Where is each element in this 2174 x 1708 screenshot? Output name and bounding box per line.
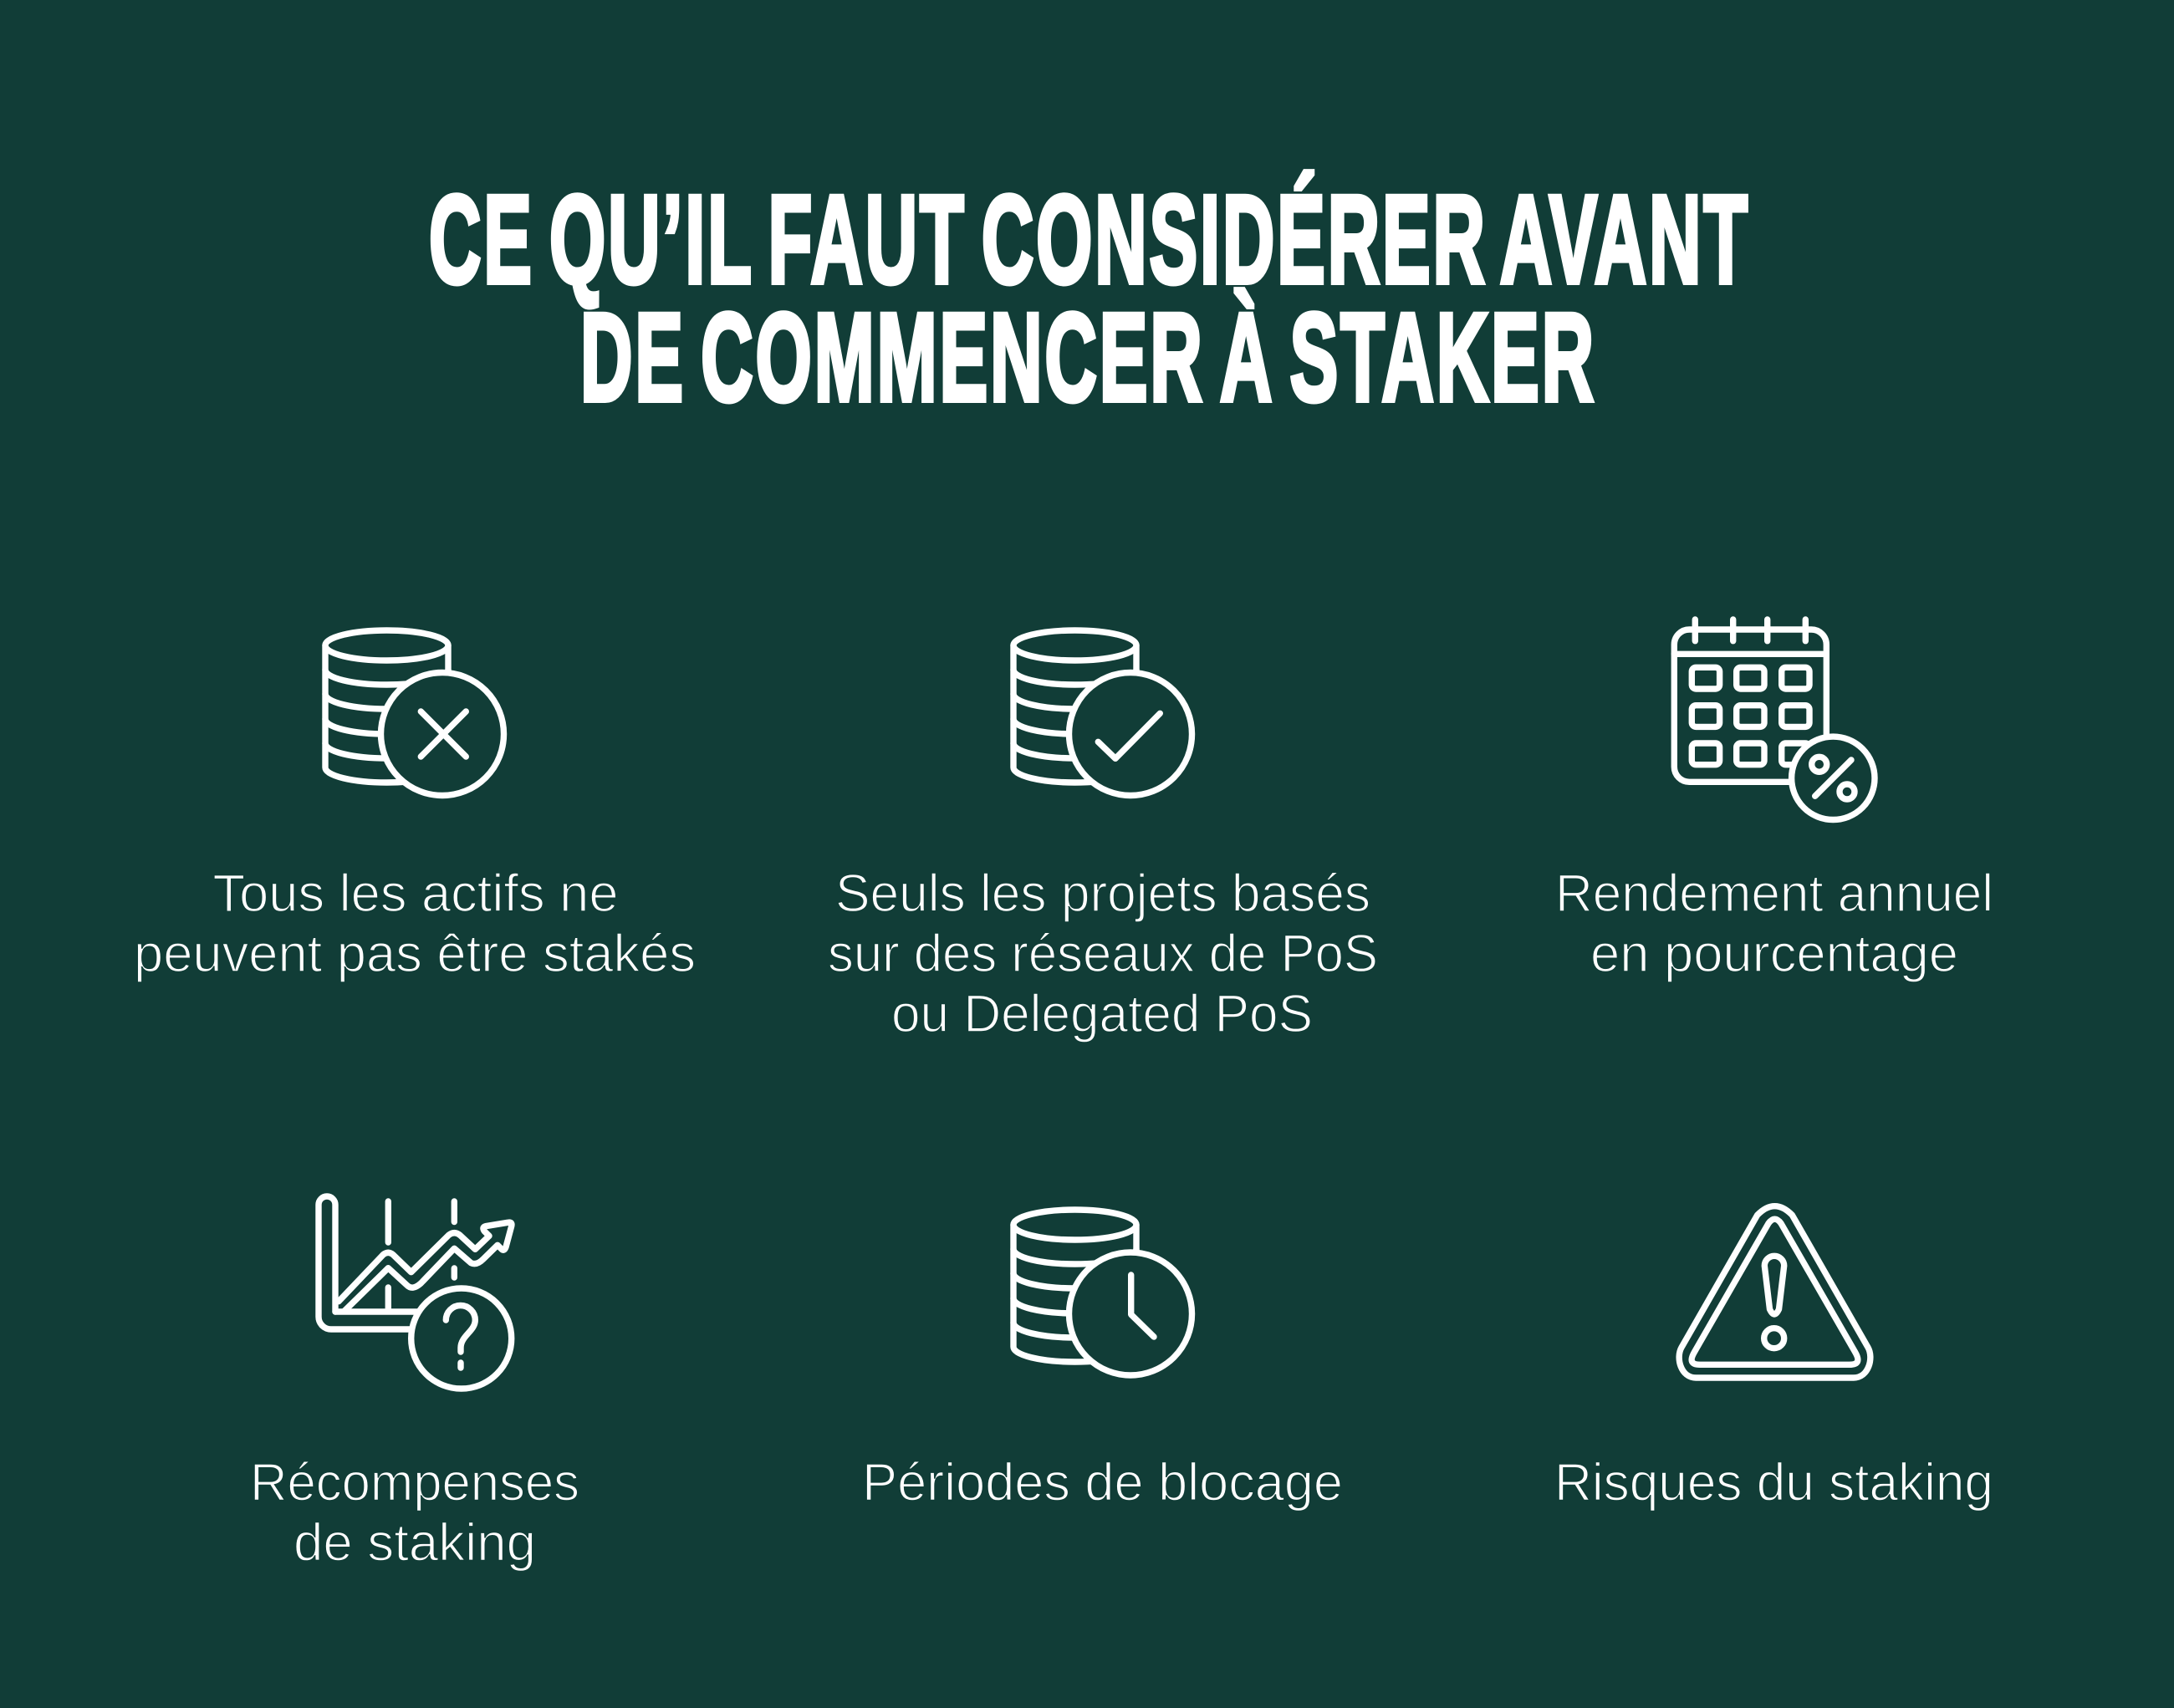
text: assets not all stakable: peuvent pas être stakés bbox=[134, 925, 696, 983]
text: assets not all stakable bbox=[134, 864, 696, 983]
icon: coin stack with clock bbox=[1013, 1210, 1192, 1375]
icon: rising chart with question mark bbox=[319, 1196, 512, 1389]
text: annual percentage yield: en pourcentage bbox=[1590, 925, 1958, 983]
text: assets not all stakable: Tous les actifs ne bbox=[212, 864, 619, 923]
text: annual percentage yield bbox=[1555, 864, 1993, 983]
text: annual percentage yield: Rendement annuel bbox=[1555, 864, 1993, 923]
text: staking rewards bbox=[250, 1453, 579, 1572]
text: staking risks: Risques du staking bbox=[1554, 1453, 1993, 1512]
panel: staking risks bbox=[1554, 1206, 1993, 1512]
panel: annual percentage yield bbox=[1555, 619, 1993, 983]
panel: PoS projects only bbox=[828, 630, 1378, 1043]
title bbox=[429, 169, 1750, 427]
text: PoS projects only: ou Delegated PoS bbox=[891, 985, 1313, 1043]
text: PoS projects only: Seuls les projets basés bbox=[835, 864, 1370, 923]
icon: coin stack with check mark bbox=[1013, 630, 1192, 796]
panel: assets not all stakable bbox=[134, 630, 696, 983]
text: PoS projects only bbox=[828, 864, 1378, 1043]
icon: warning triangle bbox=[1679, 1206, 1870, 1378]
text: PoS projects only: sur des réseaux de PoS bbox=[828, 925, 1378, 983]
icon: calendar with percent badge bbox=[1674, 619, 1875, 819]
panel: staking rewards bbox=[250, 1196, 579, 1572]
panel: lock-up periods bbox=[862, 1210, 1343, 1512]
icon: coin stack with cross bbox=[325, 630, 503, 796]
text: staking rewards: Récompenses bbox=[250, 1453, 579, 1512]
text: staking rewards: de staking bbox=[293, 1513, 536, 1572]
text: lock-up periods: Périodes de blocage bbox=[862, 1453, 1343, 1512]
